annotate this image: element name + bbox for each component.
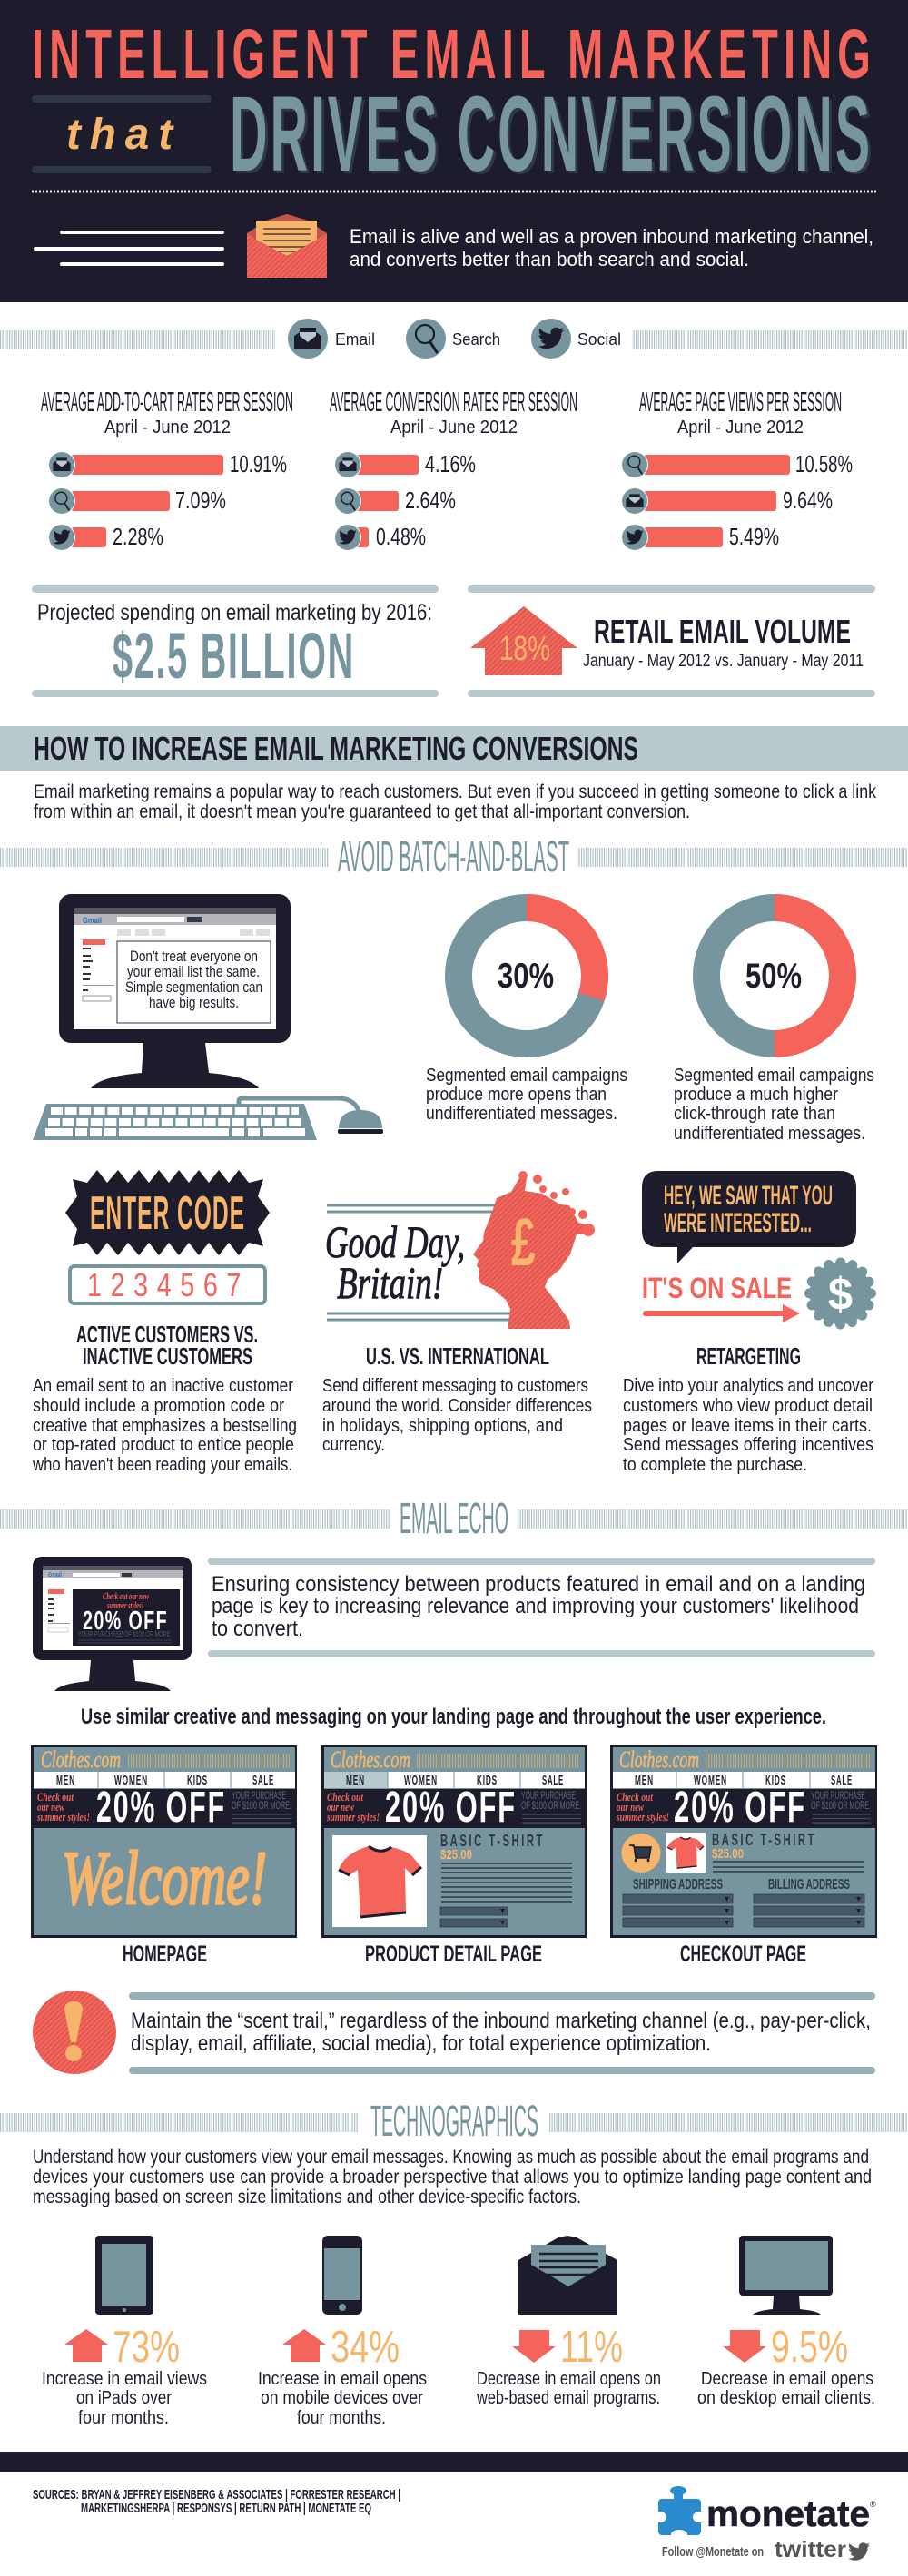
panel: checkout page: BILLING ADDRESS (768, 1877, 850, 1893)
column: active vs inactive customers: should include a promotion code or (33, 1396, 284, 1416)
column: us vs international: U.S. VS. INTERNATIONAL (366, 1342, 549, 1370)
chart: add to cart: 7.09% (175, 487, 226, 514)
chart: add to cart: 10.91% (230, 450, 287, 477)
panel: homepage: YOUR PURCHASE (232, 1789, 286, 1802)
illustration: email echo monitor: Gmail (48, 1572, 62, 1578)
chart: add to cart: 2.28% (113, 523, 163, 550)
column: active vs inactive customers: or top-rated product to entice people (33, 1435, 294, 1455)
callout: projected spending: Projected spending on email marketing by 2016: (37, 600, 432, 625)
icon: exclamation (33, 1991, 116, 2074)
panel: checkout page: KIDS (765, 1774, 786, 1788)
arrow: to sale badge (643, 1304, 800, 1322)
chart: conversion rates: 4.16% (425, 450, 476, 477)
icon: social legend (531, 319, 571, 359)
icon: dollar badge (810, 1263, 872, 1324)
chart: page views: April - June 2012 (677, 418, 804, 438)
column: retargeting: to complete the purchase. (623, 1455, 807, 1475)
icon: dark envelope (518, 2236, 617, 2315)
panel: checkout page: summer styles! (616, 1810, 669, 1824)
text block: consistency (208, 1558, 875, 1657)
donut chart: 50%: produce a much higher (674, 1085, 838, 1105)
donut chart: 50%: 50% (745, 957, 802, 996)
illustration: email echo monitor: summer styles! (106, 1601, 143, 1611)
arrow: up (282, 2329, 326, 2362)
arrow: up (64, 2329, 108, 2362)
panel: product detail page: BASIC T-SHIRT (440, 1832, 545, 1850)
callout: don't treat everyone: Simple segmentation can (125, 978, 262, 996)
column: us vs international: around the world. Consider differences (322, 1396, 592, 1416)
follow on twitter: twitter (775, 2537, 846, 2562)
chart: page views (621, 387, 853, 551)
section heading: email echo: EMAIL ECHO (400, 1495, 508, 1543)
section heading: avoid batch and blast (0, 833, 908, 881)
intro paragraph: from within an email, it doesn't mean you're guaranteed to get that all-important conversion. (34, 801, 690, 822)
callout: don't treat everyone (117, 941, 271, 1023)
panel: checkout page (610, 1745, 877, 1938)
logo: monetate: monetate (706, 2494, 870, 2534)
stat: desktop: 9.5% (771, 2323, 848, 2372)
illustration: queen silhouette: £ (511, 1204, 536, 1280)
arrow: down (723, 2330, 766, 2363)
product image (332, 1835, 427, 1927)
column: us vs international: in holidays, shipping options, and (322, 1416, 563, 1436)
icon: search legend (406, 319, 446, 359)
column: active vs inactive customers (32, 1170, 297, 1475)
stat: desktop: Decrease in email opens (701, 2369, 873, 2389)
column: retargeting: pages or leave items in their carts. (623, 1416, 872, 1436)
callout: retail email volume (468, 585, 875, 697)
intro text: and converts better than both search and social. (350, 248, 749, 270)
panel: product detail page: summer styles! (326, 1810, 380, 1824)
panel: homepage: Check out (37, 1790, 74, 1804)
logo: monetate (654, 2486, 876, 2539)
panel: product detail page (321, 1745, 587, 1938)
panel: product detail page: Clothes.com (331, 1746, 410, 1773)
illustration: queen silhouette: Good Day, (325, 1216, 465, 1267)
icon: dollar badge: $ (828, 1269, 853, 1320)
stat: ipad: four months. (78, 2408, 169, 2428)
that label with bars: that (66, 111, 182, 159)
legend: Email (335, 329, 375, 349)
stat: desktop: on desktop email clients. (697, 2388, 875, 2408)
column: active vs inactive customers: who haven't been reading your emails. (32, 1455, 292, 1475)
panel: product detail page: Check out (327, 1790, 363, 1804)
panel: homepage: SALE (252, 1774, 274, 1788)
panel: checkout page: WOMEN (694, 1774, 727, 1788)
code box: 1234567 (87, 1266, 250, 1303)
donut chart: 50% (674, 908, 874, 1144)
panel: product detail page: 20% OFF (385, 1784, 517, 1832)
chart: conversion rates: 0.48% (376, 523, 426, 550)
panel: checkout page: Clothes.com (619, 1746, 699, 1773)
callout: projected spending: $2.5 BILLION (113, 621, 355, 693)
illustration: queen silhouette: Britain! (337, 1257, 443, 1308)
panel: product detail page: $25.00 (440, 1847, 472, 1863)
stat: web email: 11% (560, 2323, 623, 2372)
chart: conversion rates: 2.64% (405, 487, 456, 514)
panel: homepage: KIDS (187, 1774, 208, 1788)
donut chart: 50%: Segmented email campaigns (674, 1066, 874, 1086)
that label with bars (32, 95, 212, 173)
section heading: technographics (0, 2098, 908, 2146)
panel: homepage: Clothes.com (41, 1746, 121, 1773)
stat: web email: Decrease in email opens on (477, 2369, 661, 2389)
panel: checkout page: 20% OFF (674, 1784, 806, 1832)
sources (33, 2487, 400, 2516)
stat: mobile: Increase in email opens (258, 2369, 427, 2389)
icon: up arrow 18% (470, 606, 577, 675)
stat: mobile: 34% (331, 2323, 400, 2372)
column: active vs inactive customers: An email sent to an inactive customer (33, 1376, 293, 1396)
logo: monetate: ® (870, 2500, 876, 2509)
illustration: email echo monitor: Check out our new (103, 1592, 149, 1602)
stat: ipad: on iPads over (76, 2388, 172, 2408)
panel: checkout page: our new (617, 1800, 644, 1814)
panel: product detail page: OF $100 OR MORE. (521, 1799, 581, 1812)
column: retargeting: Send messages offering incentives (623, 1435, 873, 1455)
chart: add to cart: April - June 2012 (104, 418, 231, 438)
column: retargeting: Dive into your analytics and uncover (623, 1376, 873, 1396)
column: active vs inactive customers: ACTIVE CUSTOMERS VS. (76, 1321, 258, 1348)
panel: product detail page: WOMEN (404, 1774, 438, 1788)
panel: product detail page: our new (327, 1800, 354, 1814)
panel: homepage: MEN (56, 1774, 75, 1788)
header panel (0, 0, 908, 302)
panel: checkout page: SALE (831, 1774, 853, 1788)
arrow: down (512, 2330, 556, 2363)
page labels: CHECKOUT PAGE (680, 1942, 806, 1967)
legend: Social (577, 329, 621, 349)
donut chart: 30%: Segmented email campaigns (426, 1066, 627, 1086)
chart: conversion rates (330, 387, 577, 551)
stat: web email (476, 2236, 661, 2408)
callout: don't treat everyone: Don't treat everyone on (130, 948, 258, 965)
icon: phone (322, 2236, 362, 2315)
panel: checkout page: BASIC T-SHIRT (712, 1831, 816, 1849)
column: retargeting (623, 1171, 873, 1475)
panel: product detail page: KIDS (477, 1774, 498, 1788)
illustration: email echo monitor: YOUR PURCHASE OF $100 OR MORE. (78, 1630, 172, 1638)
sources: SOURCES: BRYAN & JEFFREY EISENBERG & ASSOCIATES | FORRESTER RESEARCH | (33, 2487, 400, 2502)
panel: homepage: WOMEN (114, 1774, 148, 1788)
stat: ipad: 73% (113, 2323, 180, 2372)
column: us vs international: currency. (322, 1435, 385, 1455)
paragraph: technographics: messaging based on screen size limitations and other device-specific factors. (33, 2187, 581, 2207)
icon: up arrow 18%: 18% (499, 630, 550, 668)
panel: product detail page: MEN (346, 1774, 365, 1788)
panel: checkout page: MEN (635, 1774, 654, 1788)
panel: homepage: 20% OFF (96, 1784, 226, 1832)
text block: scent trail (129, 1992, 875, 2074)
chart: page views: 5.49% (729, 523, 779, 550)
callout: don't treat everyone: have big results. (149, 994, 239, 1011)
column: retargeting: customers who view product detail (623, 1396, 873, 1416)
panel: checkout page: SHIPPING ADDRESS (633, 1877, 723, 1893)
panel: product detail page: YOUR PURCHASE (521, 1789, 576, 1802)
donut chart: 30% (426, 908, 627, 1124)
column: retargeting: RETARGETING (696, 1342, 801, 1370)
column: us vs international (322, 1171, 595, 1455)
stat: ipad (42, 2236, 207, 2428)
section heading: avoid batch and blast: AVOID BATCH-AND-BLAST (338, 833, 569, 881)
text block: consistency: to convert. (212, 1617, 303, 1641)
panel: checkout page: Check out (617, 1790, 653, 1804)
panel: homepage: Welcome! (62, 1836, 267, 1921)
sources: MARKETINGSHERPA | RESPONSYS | RETURN PATH | MONETATE EQ (81, 2501, 371, 2516)
icon: open envelope (247, 214, 327, 278)
intro text: Email is alive and well as a proven inbound marketing channel, (350, 225, 873, 248)
icon: enter code starburst (65, 1170, 270, 1255)
stat: mobile: four months. (297, 2408, 386, 2428)
icon: enter code starburst: ENTER CODE (90, 1187, 245, 1240)
stat: ipad: Increase in email views (42, 2369, 207, 2389)
column: us vs international: Send different messaging to customers (322, 1376, 588, 1396)
illustration: email echo monitor (33, 1557, 192, 1691)
panel: product detail page: SALE (542, 1774, 564, 1788)
heading band: how to increase: HOW TO INCREASE EMAIL MARKETING CONVERSIONS (34, 730, 638, 767)
donut chart: 50%: undifferentiated messages. (674, 1124, 865, 1144)
stat: desktop (697, 2236, 875, 2408)
page labels: HOMEPAGE (123, 1942, 207, 1967)
illustration: desktop computer (59, 894, 291, 1088)
section heading: technographics: TECHNOGRAPHICS (370, 2098, 538, 2146)
callout: projected spending (32, 585, 439, 697)
stat: mobile: on mobile devices over (261, 2388, 423, 2408)
text: AVERAGE ADD-TO-CART RATES PER SESSION (41, 387, 293, 418)
product image small (666, 1833, 706, 1873)
follow on twitter (662, 2537, 870, 2562)
section heading: email echo (0, 1495, 908, 1543)
legend: Search (452, 329, 500, 349)
page labels: PRODUCT DETAIL PAGE (365, 1942, 542, 1967)
chart: page views: 10.58% (795, 450, 853, 477)
donut chart: 30%: produce more opens than (426, 1085, 607, 1105)
speed lines (34, 231, 224, 266)
donut chart: 30%: 30% (498, 957, 554, 996)
legend (0, 319, 908, 359)
panel: homepage (31, 1745, 297, 1938)
illustration: email echo monitor: 20% OFF (83, 1607, 168, 1636)
text block: scent trail: display, email, affiliate, social media), for total experience optimization. (131, 2031, 711, 2056)
chart: page views: 9.64% (783, 487, 833, 514)
callout: don't treat everyone: your email list the same. (127, 963, 260, 980)
donut chart: 50%: click-through rate than (674, 1104, 835, 1124)
panel: checkout page: $25.00 (712, 1846, 744, 1862)
speech bubble (642, 1171, 856, 1263)
donut chart: 30%: undifferentiated messages. (426, 1104, 617, 1124)
panel: homepage: summer styles! (36, 1810, 90, 1824)
stat: mobile (258, 2236, 427, 2428)
illustration: keyboard and mouse (33, 1098, 383, 1140)
icon: cart (621, 1834, 661, 1873)
intro paragraph (34, 782, 876, 822)
panel: homepage: our new (37, 1800, 64, 1814)
follow on twitter: Follow @Monetate on (662, 2544, 764, 2560)
column: active vs inactive customers: INACTIVE CUSTOMERS (83, 1342, 252, 1370)
column: active vs inactive customers: creative that emphasizes a bestselling (33, 1416, 297, 1436)
panel: checkout page: YOUR PURCHASE (811, 1789, 865, 1802)
stat: web email: web-based email programs. (476, 2388, 660, 2408)
icon: desktop monitor (739, 2236, 833, 2315)
illustration: desktop computer: Gmail (83, 916, 102, 925)
page labels (123, 1942, 806, 1967)
intro text (350, 225, 873, 270)
column: retargeting: IT'S ON SALE (642, 1272, 792, 1304)
illustration: queen silhouette (325, 1171, 595, 1329)
paragraph: technographics (33, 2147, 872, 2207)
chart: add to cart (41, 387, 293, 551)
icon: tablet (95, 2236, 153, 2315)
panel: homepage: OF $100 OR MORE. (232, 1799, 291, 1812)
icon: email legend (288, 319, 328, 359)
chart: conversion rates: April - June 2012 (390, 418, 518, 438)
